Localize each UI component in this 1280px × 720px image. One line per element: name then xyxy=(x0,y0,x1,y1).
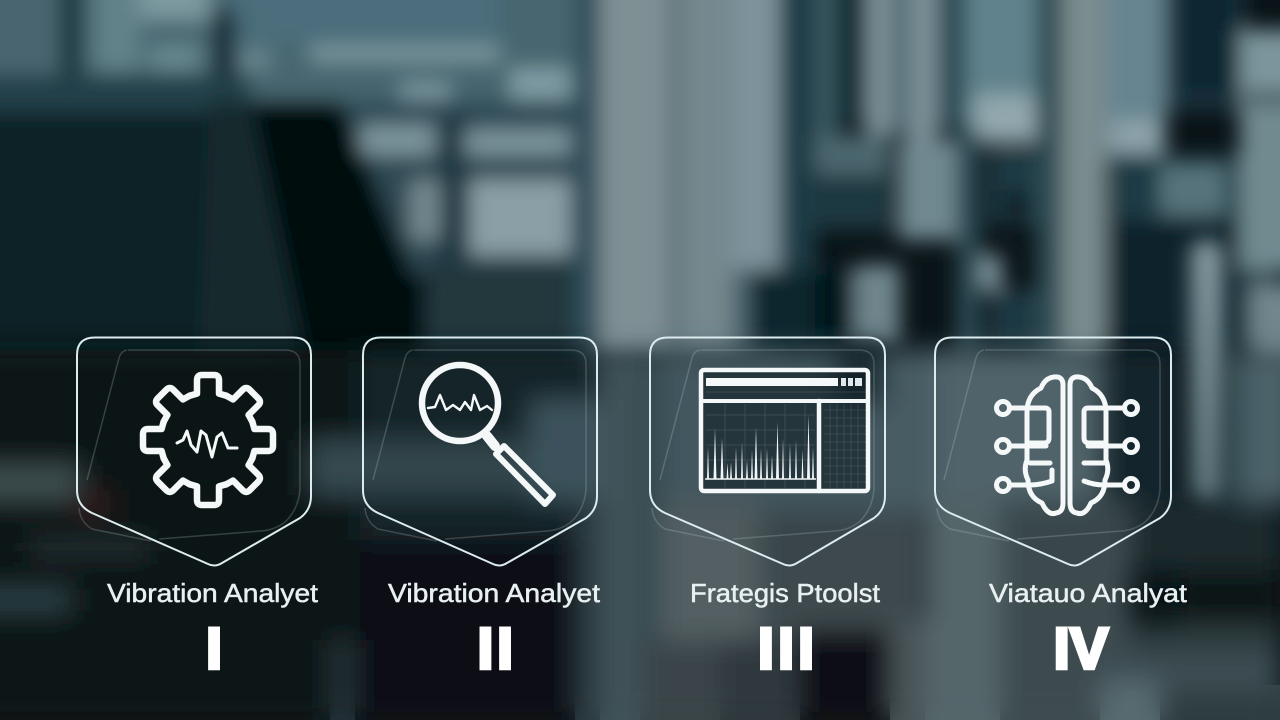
icon: gear with waveform xyxy=(143,375,273,505)
panel: card II vibration analyst xyxy=(363,338,601,682)
inner shield accent IV xyxy=(937,350,1160,541)
label III: Frategis Ptoolst xyxy=(690,578,881,608)
inner shield accent III xyxy=(652,350,874,541)
shield outline I xyxy=(77,338,311,566)
shield outline III xyxy=(650,338,885,566)
panel: card III frequency protocol xyxy=(650,338,885,682)
label I: Vibration Analyet xyxy=(107,578,319,608)
icon: circuit brain xyxy=(996,377,1138,514)
numeral III: III xyxy=(758,616,818,682)
shield outline II xyxy=(363,338,597,566)
label II: Vibration Analyet xyxy=(388,578,601,608)
numeral IV: IV xyxy=(1054,616,1109,682)
inner shield accent I xyxy=(79,350,300,541)
shield outline IV xyxy=(935,338,1171,566)
icon: magnifying glass with waveform xyxy=(422,365,553,504)
numeral I: I xyxy=(206,616,222,682)
label IV: Viatauo Analyat xyxy=(989,578,1188,608)
icon: spectrum dashboard xyxy=(701,370,868,491)
inner shield accent II xyxy=(365,350,586,541)
numeral II: II xyxy=(477,616,517,682)
panel: card I vibration analyst xyxy=(77,338,319,682)
panel: card IV virtual analyst xyxy=(935,338,1188,682)
